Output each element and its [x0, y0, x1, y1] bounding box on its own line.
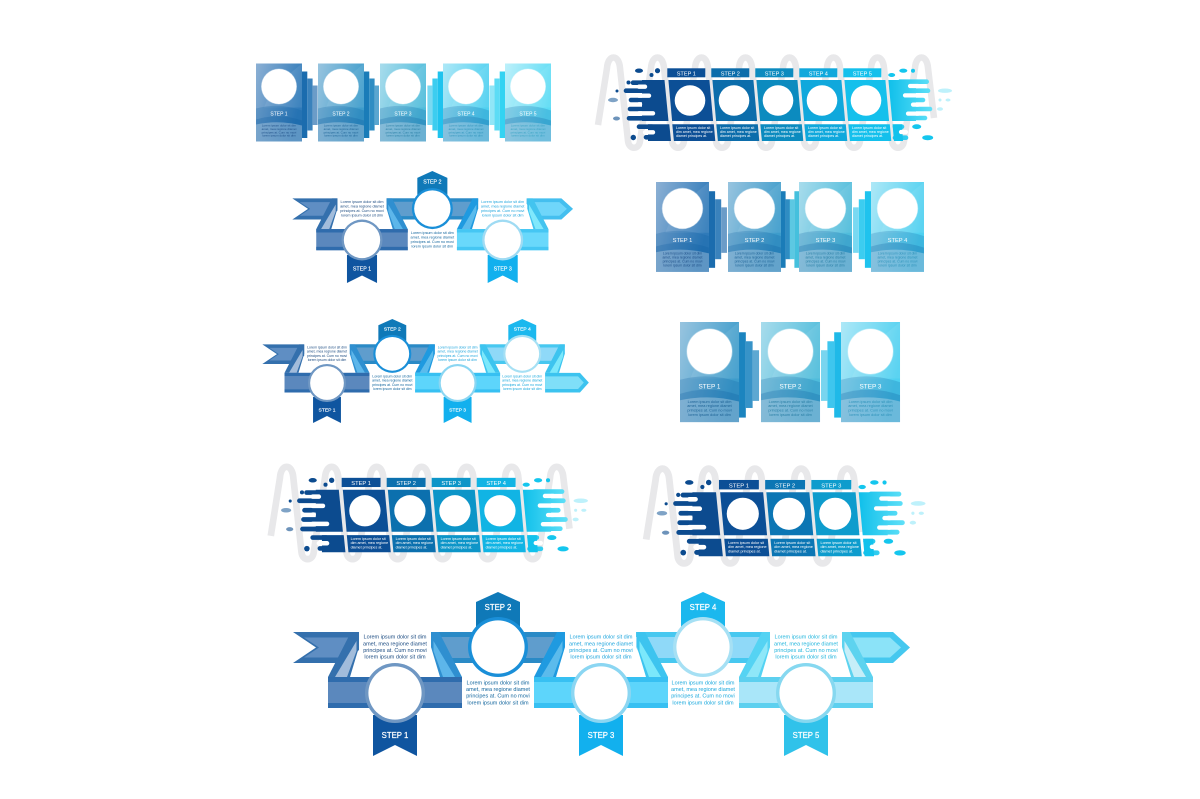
card: step 2: diamet principes at. — [396, 545, 427, 549]
text: step 1: amet, mea regione diamet — [363, 641, 427, 647]
right arrow tail — [527, 198, 573, 220]
step 3 ribbon with flag — [457, 220, 548, 283]
card: step 1: amet, mea regione diamet — [262, 127, 297, 131]
card: step 4: principes at. Cum no movi — [449, 130, 484, 134]
card: step 5 — [843, 68, 891, 141]
text: step 5: lorem ipsum dolor sit dim — [775, 655, 837, 661]
card: step 3: dim amet, mea regione — [441, 541, 478, 545]
card: step 4 — [427, 64, 489, 142]
text: step 1 — [363, 635, 427, 661]
text: step 1: Lorem ipsum dolor sit dim — [341, 200, 383, 204]
text: step 2: amet, mea regione diamet — [372, 379, 412, 383]
card: step 3: amet, mea regione diamet — [386, 127, 421, 131]
text: step 4: principes at. Cum no movi — [502, 383, 543, 387]
card: step 2: dim amet, mea regione — [774, 545, 813, 549]
right blob — [888, 69, 952, 141]
card: step 5: dim amet, mea regione — [852, 130, 889, 134]
card: step 1: lorem ipsum dolor sit dim — [262, 134, 296, 138]
text: step 1: lorem ipsum dolor sit dim — [341, 214, 383, 218]
card: step 4: STEP 4 — [486, 481, 507, 487]
step 2 ribbon with hexagon — [431, 592, 565, 677]
left ribbon tail — [293, 632, 359, 663]
card: step 2: diamet principes at. — [774, 549, 807, 553]
text: step 2 — [372, 374, 413, 391]
text: step 3: amet, mea regione diamet — [569, 641, 633, 647]
text: step 2: Lorem ipsum dolor sit dim — [372, 374, 412, 378]
text: step 2: principes at. Cum no movi — [466, 694, 530, 700]
card: step 1: lorem ipsum dolor sit dim — [663, 263, 702, 267]
card: step 2: principes at. Cum no movi — [324, 130, 359, 134]
card: step 3 — [790, 182, 852, 272]
panel: five-step blob strip — [598, 58, 952, 148]
left blob — [281, 478, 345, 552]
card: step 3: Lorem ipsum dolor sit — [441, 537, 476, 541]
card: step 4: principes at. Cum no movi — [878, 259, 918, 263]
card: step 1: amet, mea regione diamet — [663, 255, 703, 259]
text: step 2: Lorem ipsum dolor sit dim — [467, 680, 530, 686]
text: step 4: lorem ipsum dolor sit dim — [672, 700, 734, 706]
text: step 2: lorem ipsum dolor sit dim — [412, 245, 453, 249]
text: step 3 — [437, 346, 478, 362]
text: step 3: Lorem ipsum dolor sit dim — [438, 346, 478, 350]
step 4 ribbon with hexagon — [480, 319, 565, 373]
card: step 2: diamet principes at. — [720, 134, 751, 138]
left ribbon tail — [262, 344, 304, 364]
step 4 ribbon with hexagon — [636, 592, 770, 677]
fold connectors — [285, 344, 565, 373]
right arrow tail — [842, 632, 910, 663]
text: step 2 — [411, 231, 455, 249]
card: step 3: lorem ipsum dolor sit dim — [849, 413, 892, 417]
card: step 1: Lorem ipsum dolor sit — [676, 126, 710, 130]
grey spring line — [598, 58, 934, 148]
card: step 4: STEP 4 — [457, 112, 475, 118]
step 5 ribbon with flag: STEP 5 — [793, 731, 820, 740]
step 2 ribbon with hexagon: STEP 2 — [485, 603, 511, 612]
left ribbon tail — [292, 198, 337, 220]
card: step 3: amet, mea regione diamet — [848, 404, 894, 408]
text: step 5: amet, mea regione diamet — [774, 641, 838, 647]
card: step 2 — [765, 480, 816, 556]
panel: three-step cards — [680, 322, 900, 422]
card: step 5: lorem ipsum dolor sit dim — [511, 134, 545, 138]
card: step 3: lorem ipsum dolor sit dim — [386, 134, 420, 138]
card: step 1: Lorem ipsum dolor sit dim — [262, 124, 297, 128]
card: step 3: Lorem ipsum dolor sit dim — [849, 400, 892, 404]
text: step 2: amet, mea regione diamet — [466, 687, 530, 693]
card: step 4: dim amet, mea regione — [808, 130, 845, 134]
card: step 4: STEP 4 — [809, 71, 828, 77]
card: step 5: diamet principes at. — [852, 134, 883, 138]
card: step 3: STEP 3 — [441, 481, 461, 487]
card: step 3: dim amet, mea regione — [764, 130, 801, 134]
text: step 3: Lorem ipsum dolor sit dim — [570, 635, 633, 641]
text: step 1: principes at. Cum no movi — [340, 209, 384, 213]
card: step 1: dim amet, mea regione — [676, 130, 713, 134]
card: step 3: STEP 3 — [394, 112, 412, 118]
card: step 5: STEP 5 — [519, 112, 537, 118]
card: step 3: diamet principes at. — [441, 545, 472, 549]
card: step 5: STEP 5 — [853, 71, 872, 77]
card: step 2 — [711, 68, 759, 141]
card: step 1: Lorem ipsum dolor sit — [728, 541, 765, 545]
step 1 ribbon with flag — [328, 663, 462, 756]
card: step 3: amet, mea regione diamet — [806, 255, 846, 259]
card: step 5 — [489, 64, 551, 142]
card: step 2: STEP 2 — [332, 112, 350, 118]
card: step 3: STEP 3 — [860, 384, 882, 391]
card: step 3: Lorem ipsum dolor sit dim — [386, 124, 421, 128]
text: step 2: amet, mea regione diamet — [411, 236, 455, 240]
card: step 4: Lorem ipsum dolor sit dim — [449, 124, 484, 128]
step 3 ribbon with flag: STEP 3 — [449, 408, 466, 414]
panel: three-step ribbon — [292, 171, 573, 283]
card: step 1: diamet principes at. — [728, 549, 761, 553]
fold connectors — [328, 632, 873, 677]
card: step 2: Lorem ipsum dolor sit dim — [769, 400, 812, 404]
right arrow tail — [545, 373, 589, 393]
step 2 ribbon with hexagon — [387, 171, 478, 229]
card: step 2 — [761, 322, 820, 422]
card: step 2: STEP 2 — [745, 238, 764, 244]
card: step 5: principes at. Cum no movi — [511, 130, 546, 134]
card: step 1: STEP 1 — [270, 112, 288, 118]
text: step 4: lorem ipsum dolor sit dim — [503, 387, 542, 391]
text: step 4: Lorem ipsum dolor sit dim — [672, 680, 735, 686]
card: step 3: STEP 3 — [816, 238, 835, 244]
card: step 2: dim amet, mea regione — [396, 541, 433, 545]
card: step 5: amet, mea regione diamet — [511, 127, 546, 131]
card: step 3: diamet principes at. — [820, 549, 853, 553]
left blob — [608, 68, 671, 141]
card: step 2: lorem ipsum dolor sit dim — [735, 263, 774, 267]
card: step 4: lorem ipsum dolor sit dim — [449, 134, 483, 138]
step 3 ribbon with flag: STEP 3 — [588, 731, 614, 740]
panel: four-step ribbon — [262, 319, 589, 423]
card: step 1 — [680, 322, 759, 422]
card: step 4: Lorem ipsum dolor sit — [486, 537, 521, 541]
step 1 ribbon with flag — [285, 364, 369, 423]
card: step 3: Lorem ipsum dolor sit — [820, 541, 857, 545]
text: step 5 — [774, 635, 838, 661]
card: step 4: dim amet, mea regione — [486, 541, 523, 545]
text: step 3: principes at. Cum no movi — [569, 648, 633, 654]
card: step 1: Lorem ipsum dolor sit dim — [688, 400, 731, 404]
step 1 ribbon with flag: STEP 1 — [382, 731, 408, 740]
card: step 1 — [656, 182, 727, 272]
card: step 1: Lorem ipsum dolor sit — [351, 537, 386, 541]
card: step 1: principes at. Cum no movi — [687, 409, 732, 413]
step 2 ribbon with hexagon: STEP 2 — [423, 179, 441, 185]
card: step 3: Lorem ipsum dolor sit — [764, 126, 798, 130]
step 4 ribbon with hexagon: STEP 4 — [690, 603, 717, 612]
text: step 5: principes at. Cum no movi — [774, 648, 838, 654]
text: step 3 — [569, 635, 633, 661]
card: step 1: STEP 1 — [729, 483, 749, 489]
text: step 3: principes at. Cum no movi — [481, 209, 525, 213]
card: step 4: diamet principes at. — [486, 545, 517, 549]
card: step 3: lorem ipsum dolor sit dim — [806, 263, 845, 267]
text: step 4 — [502, 374, 543, 391]
card: step 1: amet, mea regione diamet — [687, 404, 733, 408]
text: step 1: Lorem ipsum dolor sit dim — [307, 346, 347, 350]
card: step 4 — [477, 478, 526, 552]
text: step 1: amet, mea regione diamet — [307, 350, 347, 354]
card: step 1: STEP 1 — [677, 71, 696, 77]
card: step 1: principes at. Cum no movi — [262, 130, 297, 134]
card: step 4: amet, mea regione diamet — [449, 127, 484, 131]
text: step 3: lorem ipsum dolor sit dim — [570, 655, 632, 661]
step 1 ribbon with flag: STEP 1 — [353, 267, 371, 273]
card: step 2: principes at. Cum no movi — [735, 259, 775, 263]
card: step 2: amet, mea regione diamet — [735, 255, 775, 259]
text: step 4: amet, mea regione diamet — [502, 379, 542, 383]
text: step 4: Lorem ipsum dolor sit dim — [502, 374, 542, 378]
card: step 2: amet, mea regione diamet — [324, 127, 359, 131]
card: step 2: Lorem ipsum dolor sit — [396, 537, 431, 541]
card: step 4: STEP 4 — [888, 238, 908, 244]
card: step 1: principes at. Cum no movi — [663, 259, 703, 263]
card: step 4 — [853, 182, 924, 272]
card: step 2: Lorem ipsum dolor sit — [774, 541, 811, 545]
right blob — [859, 480, 926, 556]
card: step 1: diamet principes at. — [676, 134, 707, 138]
card: step 1: lorem ipsum dolor sit dim — [688, 413, 731, 417]
card: step 4: diamet principes at. — [808, 134, 839, 138]
card: step 1: diamet principes at. — [351, 545, 382, 549]
card: step 5: Lorem ipsum dolor sit — [852, 126, 886, 130]
card: step 2: amet, mea regione diamet — [768, 404, 814, 408]
text: step 1: Lorem ipsum dolor sit dim — [364, 635, 427, 641]
card: step 4: Lorem ipsum dolor sit — [808, 126, 842, 130]
card: step 2: STEP 2 — [780, 384, 802, 391]
text: step 1 — [307, 346, 347, 362]
text: step 4: amet, mea regione diamet — [671, 687, 735, 693]
step 5 ribbon with flag — [739, 663, 873, 756]
panel: five-step cards — [256, 64, 551, 142]
panel: four-step blob strip — [271, 467, 588, 559]
card: step 4: Lorem ipsum dolor sit dim — [878, 252, 917, 256]
card: step 2: principes at. Cum no movi — [768, 409, 813, 413]
text: step 2: principes at. Cum no movi — [411, 240, 454, 244]
card: step 1: dim amet, mea regione — [351, 541, 388, 545]
text: step 2: lorem ipsum dolor sit dim — [467, 700, 529, 706]
card: step 2: lorem ipsum dolor sit dim — [324, 134, 358, 138]
card: step 1 — [342, 478, 391, 552]
card: step 2: STEP 2 — [721, 71, 740, 77]
card: step 1: STEP 1 — [699, 384, 721, 391]
grey spring line — [271, 467, 570, 559]
card: step 3 — [432, 478, 481, 552]
card: step 1: STEP 1 — [673, 238, 692, 244]
text: step 3: amet, mea regione diamet — [481, 204, 525, 208]
card: step 2: STEP 2 — [775, 483, 795, 489]
text: step 3: principes at. Cum no movi — [438, 354, 478, 358]
grey spring line — [646, 469, 860, 563]
card: step 2: lorem ipsum dolor sit dim — [769, 413, 812, 417]
text: step 2: Lorem ipsum dolor sit dim — [411, 231, 454, 235]
text: step 2 — [466, 680, 530, 706]
text: step 2: lorem ipsum dolor sit dim — [373, 387, 412, 391]
card: step 2: Lorem ipsum dolor sit dim — [324, 124, 359, 128]
card: step 3: dim amet, mea regione — [820, 545, 859, 549]
card: step 3: principes at. Cum no movi — [848, 409, 893, 413]
card: step 2 — [318, 64, 379, 142]
card: step 3 — [755, 68, 803, 141]
text: step 3 — [481, 200, 525, 218]
step 2 ribbon with hexagon: STEP 2 — [384, 326, 401, 332]
card: step 3 — [811, 480, 862, 556]
step 4 ribbon with hexagon: STEP 4 — [514, 326, 531, 332]
card: step 2: Lorem ipsum dolor sit dim — [735, 252, 774, 256]
card: step 4: amet, mea regione diamet — [878, 255, 918, 259]
card: step 3: STEP 3 — [821, 483, 841, 489]
panel: three-step blob strip — [646, 469, 926, 563]
card: step 1: STEP 1 — [351, 481, 371, 487]
card: step 1: Lorem ipsum dolor sit dim — [663, 252, 702, 256]
fold connectors — [316, 198, 548, 229]
card: step 3 — [380, 64, 426, 142]
text: step 3: Lorem ipsum dolor sit dim — [481, 200, 524, 204]
card: step 1 — [719, 480, 769, 556]
text: step 1: principes at. Cum no movi — [363, 648, 427, 654]
step 3 ribbon with flag — [534, 663, 668, 756]
text: step 3: lorem ipsum dolor sit dim — [438, 358, 477, 362]
card: step 3 — [821, 322, 900, 422]
step 1 ribbon with flag: STEP 1 — [319, 408, 336, 414]
text: step 4 — [671, 680, 735, 706]
card: step 4 — [799, 68, 847, 141]
card: step 5: Lorem ipsum dolor sit dim — [511, 124, 546, 128]
text: step 2: principes at. Cum no movi — [372, 383, 413, 387]
card: step 2: Lorem ipsum dolor sit — [720, 126, 754, 130]
card: step 1: dim amet, mea regione — [728, 545, 767, 549]
step 3 ribbon with flag: STEP 3 — [494, 267, 512, 273]
card: step 3: principes at. Cum no movi — [806, 259, 846, 263]
right blob — [523, 478, 588, 552]
card: step 3: principes at. Cum no movi — [386, 130, 421, 134]
text: step 1: lorem ipsum dolor sit dim — [364, 655, 426, 661]
panel: four-step cards — [656, 182, 924, 272]
text: step 3: lorem ipsum dolor sit dim — [482, 214, 524, 218]
card: step 4: lorem ipsum dolor sit dim — [878, 263, 917, 267]
card: step 3: diamet principes at. — [764, 134, 795, 138]
card: step 1 — [256, 64, 318, 142]
card: step 2 — [387, 478, 436, 552]
text: step 1: principes at. Cum no movi — [307, 354, 347, 358]
card: step 2: dim amet, mea regione — [720, 130, 757, 134]
step 3 ribbon with flag — [415, 364, 500, 423]
card: step 2: STEP 2 — [396, 481, 416, 487]
left blob — [657, 480, 723, 556]
text: step 1: amet, mea regione diamet — [340, 204, 385, 208]
text: step 5: Lorem ipsum dolor sit dim — [775, 635, 838, 641]
step 2 ribbon with hexagon — [350, 319, 435, 373]
text: step 1 — [340, 200, 385, 218]
text: step 4: principes at. Cum no movi — [671, 694, 735, 700]
text: step 1: lorem ipsum dolor sit dim — [308, 358, 346, 362]
text: step 3: amet, mea regione diamet — [437, 350, 478, 354]
step 1 ribbon with flag — [316, 220, 408, 283]
card: step 3: STEP 3 — [765, 71, 784, 77]
card: step 2 — [728, 182, 790, 272]
panel: five-step ribbon — [293, 592, 910, 756]
card: step 1 — [667, 68, 715, 141]
card: step 3: Lorem ipsum dolor sit dim — [806, 252, 845, 256]
